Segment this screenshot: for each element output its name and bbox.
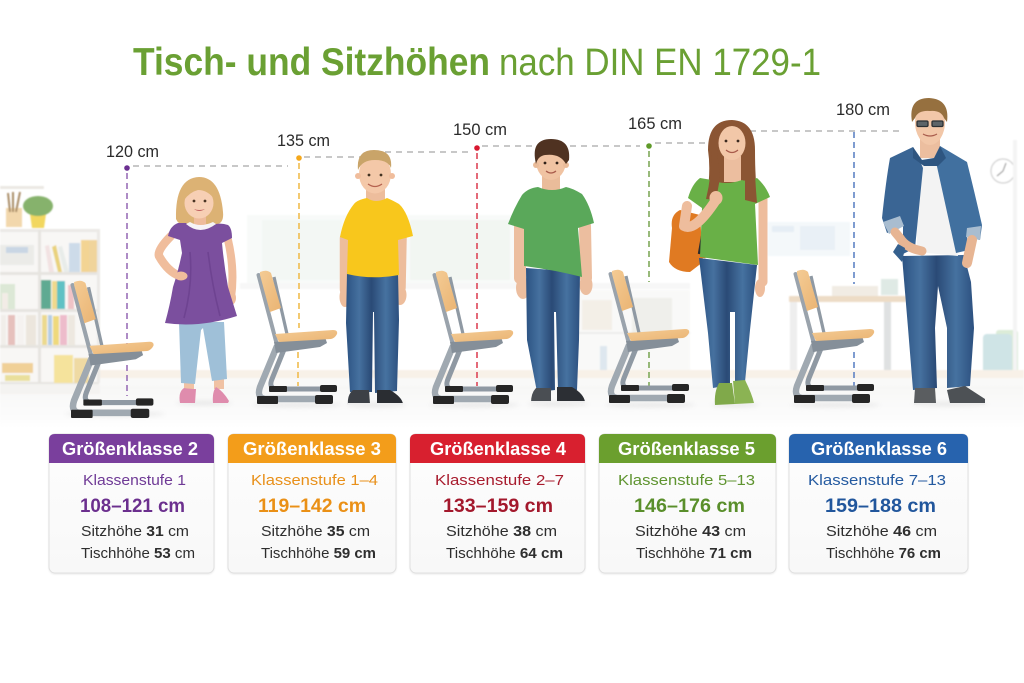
card: Größenklasse 5 [599,434,776,573]
card: Größenklasse 4: Größenklasse 4 [430,439,566,459]
card: Größenklasse 4: Tischhöhe 64 cm [446,545,563,562]
chair: Größenklasse 5 [609,270,689,403]
card: Größenklasse 3 [228,434,396,573]
card: Größenklasse 5: Sitzhöhe 43 cm [635,523,746,540]
height marker: 135 cm [277,132,330,386]
card: Größenklasse 3: Tischhöhe 59 cm [261,545,376,562]
height marker: 150 cm [453,121,507,386]
card: Größenklasse 2: 108–121 cm [80,495,185,517]
card: Größenklasse 3: Sitzhöhe 35 cm [261,523,370,540]
window [240,215,690,289]
card: Größenklasse 5: Größenklasse 5 [618,439,755,459]
height marker: 150 cm: 150 cm [453,121,507,139]
card: Größenklasse 4: Sitzhöhe 38 cm [446,523,557,540]
teen: boy in denim jacket with glasses [882,98,985,405]
chair: Größenklasse 2 [71,281,154,418]
height marker: 120 cm: 120 cm [106,143,159,161]
floor shadows [65,400,988,416]
child: girl in purple dress [159,177,237,403]
card: Größenklasse 2 [49,434,214,573]
child: girl with orange backpack [669,120,770,405]
chair: Größenklasse 6 [794,270,874,403]
glasses [917,121,943,126]
back shelf [578,290,690,372]
title: Tisch- und Sitzhöhen [133,41,490,84]
height marker: 165 cm [628,115,682,386]
height marker: 135 cm: 135 cm [277,132,330,150]
title [133,41,821,84]
desk [789,279,906,382]
classroom background [0,140,1024,430]
card: Größenklasse 3: Größenklasse 3 [243,439,381,459]
wall clock [991,159,1015,183]
floor [0,385,1024,430]
card: Größenklasse 2: Größenklasse 2 [62,439,198,459]
card: Größenklasse 4 [410,434,585,573]
chair: Größenklasse 4 [433,271,513,404]
card: Größenklasse 6: 159–188 cm [825,495,936,517]
card: Größenklasse 5: Tischhöhe 71 cm [636,545,752,562]
card: Größenklasse 6: Klassenstufe 7–13 [808,472,946,489]
height marker: 180 cm: 180 cm [836,101,890,119]
corner bin [983,140,1018,378]
child: boy in yellow shirt [340,150,413,405]
card: Größenklasse 6: Größenklasse 6 [811,439,947,459]
bookshelf [0,186,100,385]
whiteboard [768,222,850,256]
card: Größenklasse 3: 119–142 cm [258,495,366,517]
card: Größenklasse 5: 146–176 cm [634,495,745,517]
title: nach DIN EN 1729-1 [499,42,821,84]
card: Größenklasse 5: Klassenstufe 5–13 [618,472,755,489]
card: Größenklasse 6 [789,434,968,573]
child: boy in green shirt [508,139,594,403]
card: Größenklasse 2: Sitzhöhe 31 cm [81,523,189,540]
card: Größenklasse 2: Tischhöhe 53 cm [81,545,195,562]
height marker: 165 cm: 165 cm [628,115,682,133]
card: Größenklasse 2: Klassenstufe 1 [83,472,186,489]
card: Größenklasse 6: Sitzhöhe 46 cm [826,523,937,540]
card: Größenklasse 3: Klassenstufe 1–4 [251,472,378,489]
card: Größenklasse 4: 133–159 cm [443,495,553,517]
card: Größenklasse 6: Tischhöhe 76 cm [826,545,941,562]
height marker: 120 cm [106,143,159,396]
chair: Größenklasse 3 [257,271,337,404]
height guide: horizontal dashed connectors [133,131,902,166]
card: Größenklasse 4: Klassenstufe 2–7 [435,472,564,489]
